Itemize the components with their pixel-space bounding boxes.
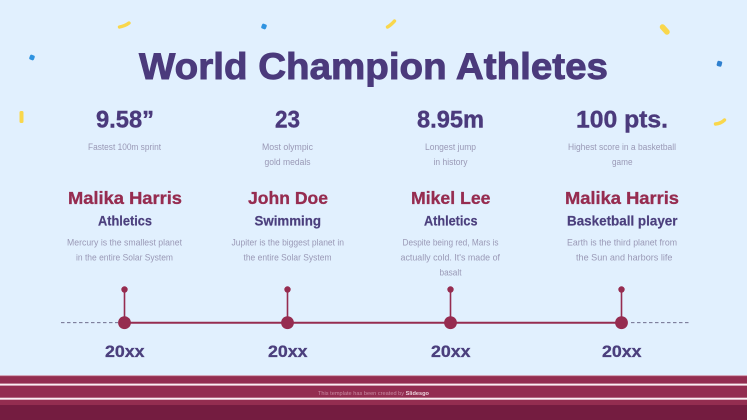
description bbox=[67, 238, 182, 262]
athlete name: Malika Harris bbox=[565, 188, 679, 208]
description: basalt bbox=[440, 268, 462, 278]
stat: 9.58 seconds: 9.58” bbox=[96, 106, 154, 134]
sport: Basketball player bbox=[567, 214, 678, 228]
description: Earth is the third planet from bbox=[567, 238, 677, 248]
column: John Doe, swimming bbox=[232, 106, 344, 262]
confetti decorations bbox=[20, 21, 724, 124]
title: World Champion Athletes bbox=[139, 46, 608, 87]
timeline bbox=[61, 286, 690, 329]
description bbox=[567, 238, 677, 262]
year labels: 20xx bbox=[268, 343, 308, 361]
column: Mikel Lee, athletics bbox=[400, 106, 500, 278]
stat description: in history bbox=[434, 157, 468, 167]
year labels bbox=[105, 343, 642, 361]
sport: Athletics bbox=[98, 214, 152, 228]
description: Despite being red, Mars is bbox=[402, 238, 499, 248]
stat description: Highest score in a basketball bbox=[568, 142, 676, 152]
stat: 8.95 metres: 8.95m bbox=[417, 106, 484, 134]
marker 1 bbox=[118, 286, 131, 329]
running track footer bbox=[0, 375, 747, 420]
year labels: 20xx bbox=[431, 343, 471, 361]
description: in the entire Solar System bbox=[76, 252, 173, 262]
stat description: gold medals bbox=[264, 157, 311, 167]
stat description bbox=[568, 142, 676, 167]
marker 2 bbox=[281, 286, 294, 329]
description: the Sun and harbors life bbox=[576, 252, 672, 262]
credit line: This template has been created by Slidesgo bbox=[318, 391, 429, 397]
stat: 23 medals: 23 bbox=[275, 106, 300, 134]
stat description: Fastest 100m sprint bbox=[88, 142, 161, 152]
column: Malika Harris, athletics bbox=[67, 106, 182, 262]
description: Jupiter is the biggest planet in bbox=[232, 238, 344, 248]
athlete name: John Doe bbox=[248, 188, 328, 208]
stat: 100 points: 100 pts. bbox=[576, 106, 668, 134]
athlete name: Malika Harris bbox=[68, 188, 182, 208]
description bbox=[400, 238, 500, 278]
athlete name: Mikel Lee bbox=[411, 188, 491, 208]
sport: Athletics bbox=[424, 214, 478, 228]
stat description: Most olympic bbox=[262, 142, 313, 152]
stat description: Longest jump bbox=[425, 142, 476, 152]
description: the entire Solar System bbox=[244, 252, 332, 262]
description bbox=[232, 238, 344, 262]
marker 4 bbox=[615, 286, 628, 329]
sport: Swimming bbox=[254, 214, 321, 228]
year labels: 20xx bbox=[105, 343, 145, 361]
marker 3 bbox=[444, 286, 457, 329]
column: Malika Harris, basketball bbox=[565, 106, 679, 262]
stat description bbox=[425, 142, 476, 167]
description: actually cold. It's made of bbox=[400, 252, 500, 262]
stat description: game bbox=[612, 157, 632, 167]
description: Mercury is the smallest planet bbox=[67, 238, 182, 248]
stat description bbox=[262, 142, 313, 167]
year labels: 20xx bbox=[602, 343, 642, 361]
